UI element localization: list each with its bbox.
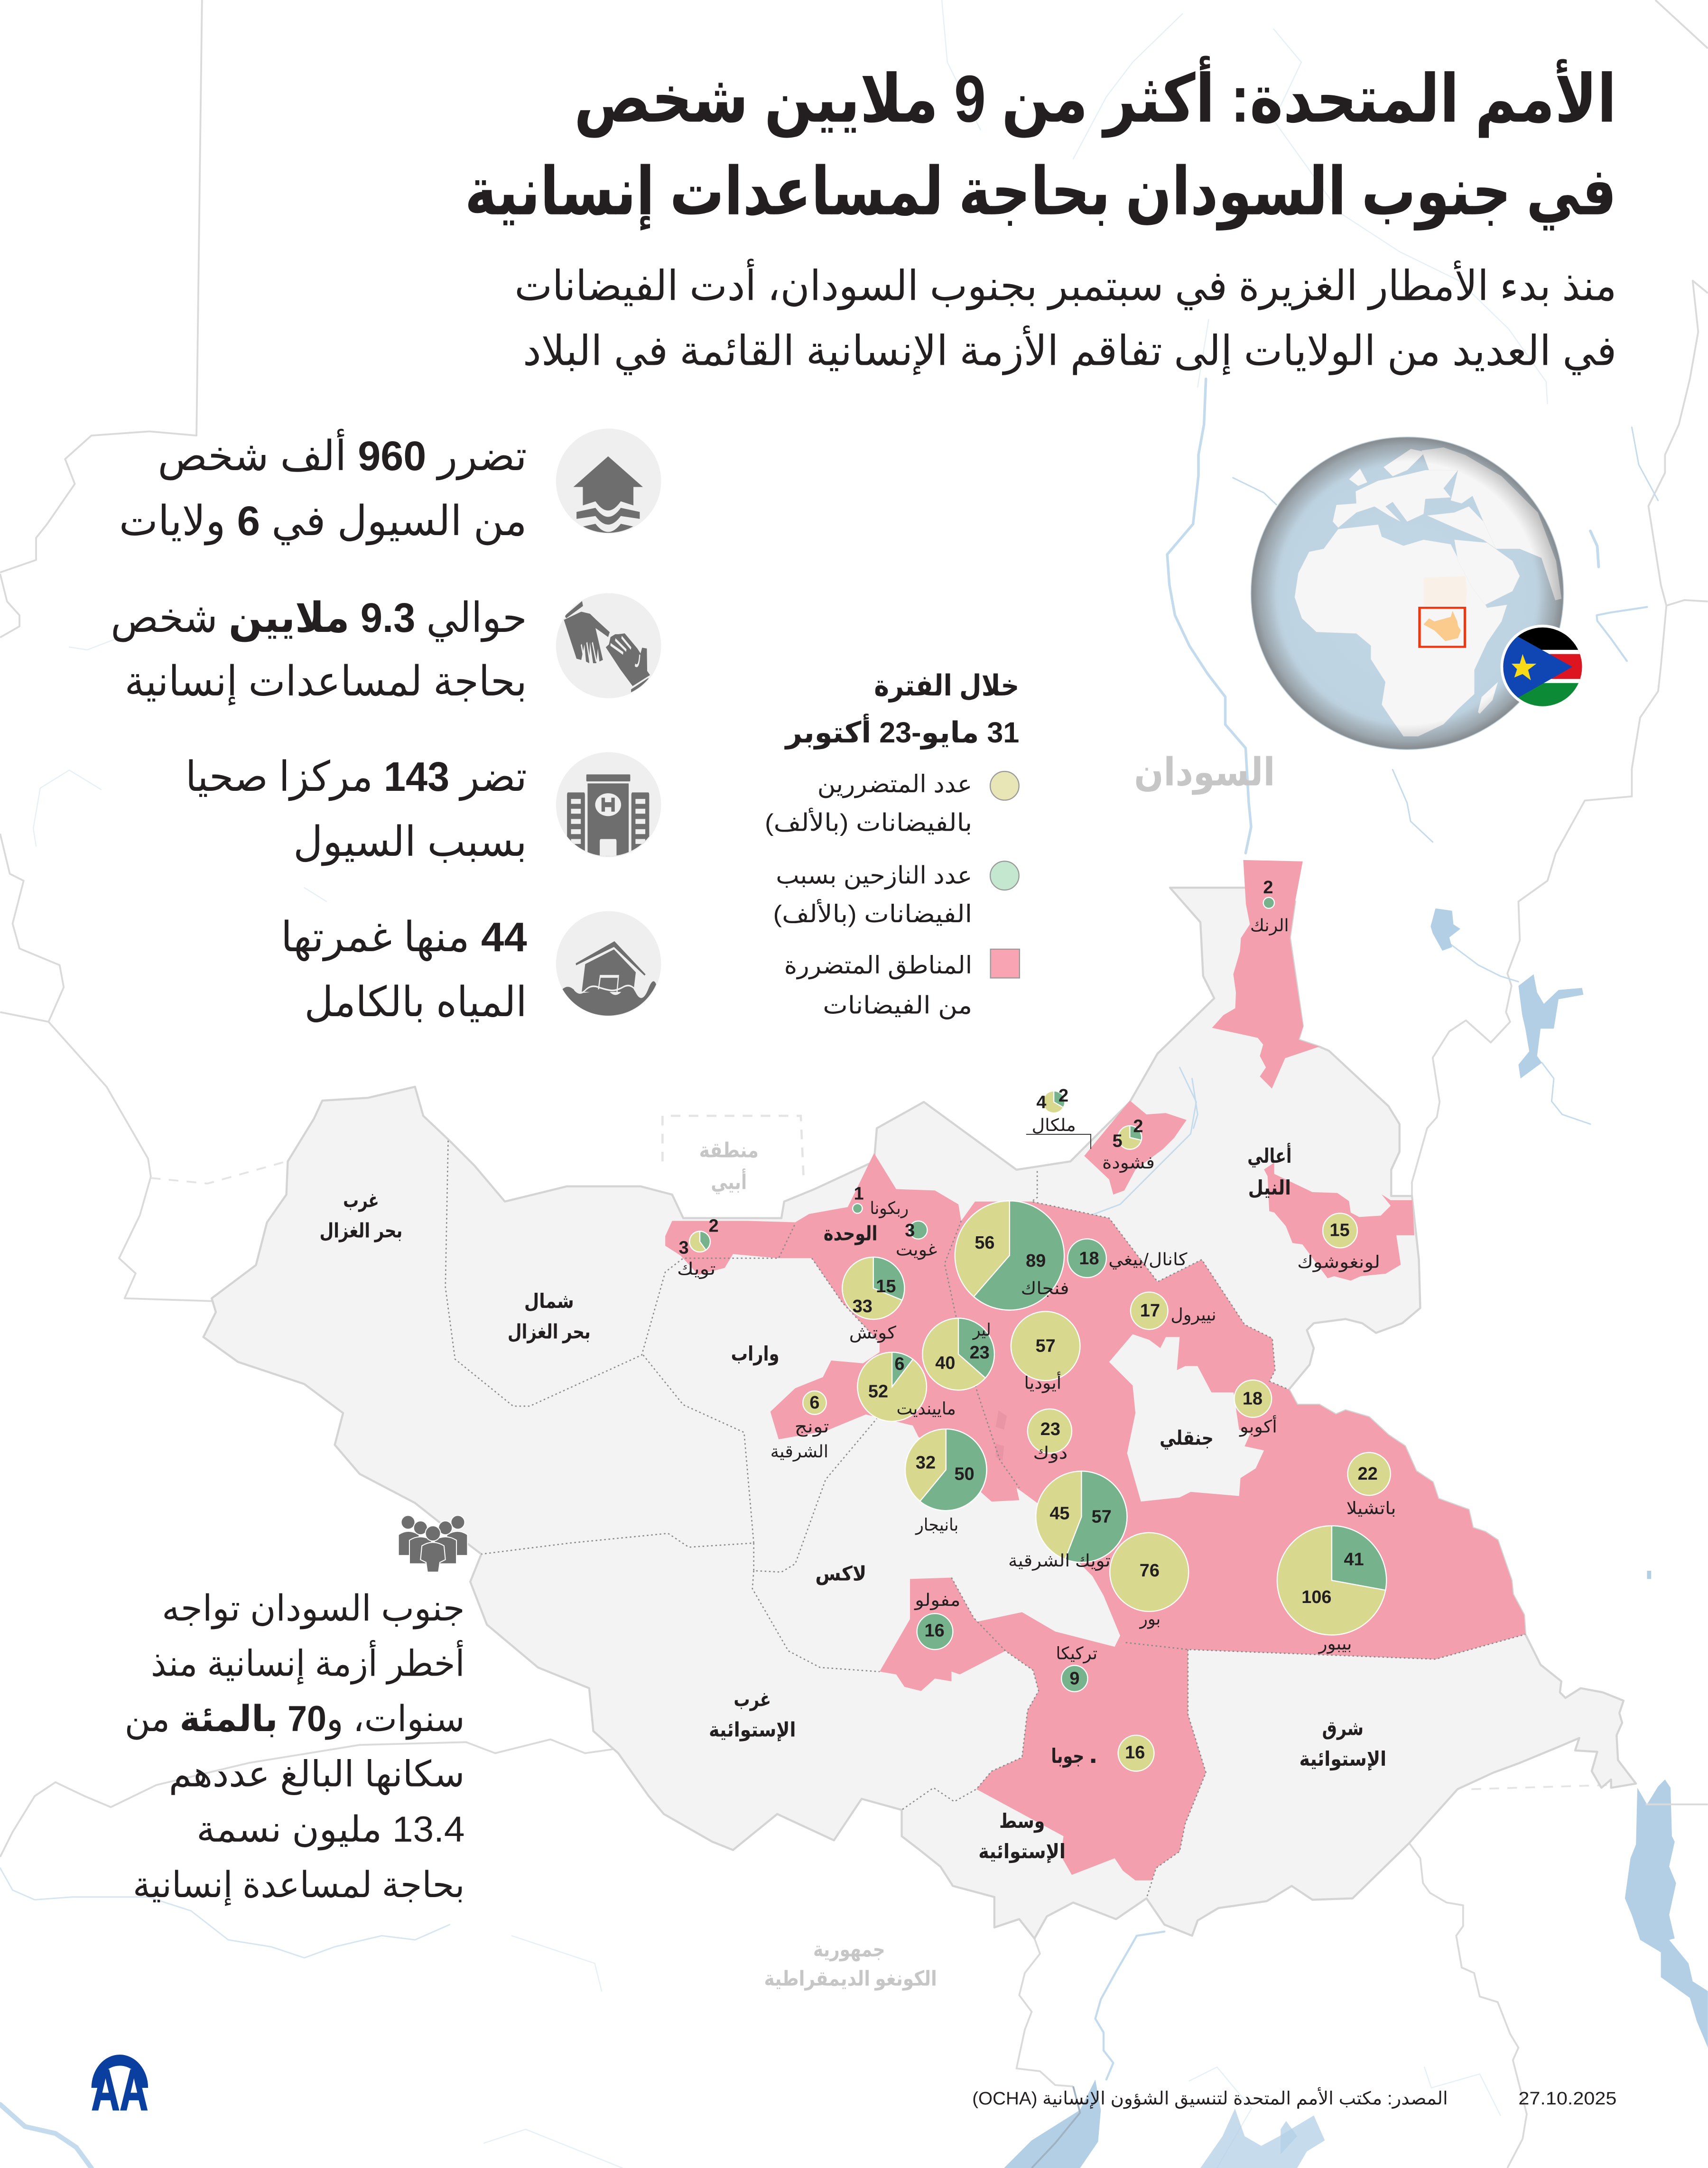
bubble: Bor — [1110, 1533, 1188, 1612]
pie: Panyijar — [905, 1429, 987, 1510]
bubble: Nyirol — [1131, 1292, 1168, 1329]
map: county labels: تونج — [795, 1417, 829, 1436]
bubble: Rubkona: 1 — [854, 1184, 864, 1204]
map: county labels: أكوبو — [1239, 1415, 1277, 1436]
map: county labels: مفولو — [914, 1590, 960, 1610]
map: neighbouring country names: أبيي — [711, 1168, 747, 1195]
map: county labels: أيوديا — [1024, 1372, 1061, 1393]
icon: hospital — [556, 752, 661, 860]
map: county labels: فشودة — [1102, 1153, 1155, 1173]
map: region names: وسط — [999, 1810, 1045, 1833]
map: county labels: الشرقية — [770, 1442, 828, 1462]
map: region names: الإستوائية — [1299, 1748, 1386, 1771]
map: neighbouring country names — [699, 750, 1275, 1991]
pie: Fashoda: 2 — [1133, 1116, 1143, 1136]
map: region names — [320, 1143, 1386, 1863]
map: county labels: تويك الشرقية — [1008, 1551, 1111, 1571]
text block: humanitarian crisis note: بحاجة لمساعدة إنسانية — [133, 1865, 465, 1906]
locator globe — [1251, 437, 1563, 750]
pie: Malakal: 4 — [1036, 1093, 1046, 1112]
pie: Leer: 23 — [970, 1343, 990, 1362]
bubble: Ayod — [1011, 1311, 1080, 1380]
bubble: Canal Pigi — [1068, 1239, 1106, 1278]
bubble: Guit: 3 — [905, 1221, 915, 1241]
icon: South Sudan flag — [1500, 624, 1582, 706]
bubble: Mvolo — [917, 1613, 953, 1649]
map: region names: بحر الغزال — [508, 1320, 591, 1343]
pie: Twic East: 45 — [1049, 1504, 1069, 1524]
legend item: affected areas — [784, 949, 1020, 1019]
bubble: Renk: 2 — [1263, 878, 1273, 898]
legend item: affected: عدد المتضررين — [817, 770, 972, 798]
bubble: Tonj East — [803, 1391, 826, 1415]
bubble: Duk: 23 — [1040, 1419, 1060, 1439]
map: county labels: مايينديت — [896, 1399, 956, 1418]
map: neighbouring country names: جمهورية — [813, 1938, 885, 1962]
pie: Mayendit: 52 — [868, 1381, 888, 1401]
map: county labels: ربكونا — [870, 1198, 909, 1218]
map: county labels — [677, 916, 1396, 1768]
map: region names: غرب — [343, 1189, 379, 1212]
map: county labels: غويت — [896, 1240, 937, 1260]
text block: humanitarian crisis note: جنوب السودان تواجه — [162, 1588, 465, 1630]
bubble: Longochuk: 15 — [1330, 1220, 1350, 1240]
map: region names: لاكس — [815, 1562, 866, 1585]
icon: helping hands — [556, 593, 661, 698]
pie: Panyijar: 50 — [955, 1464, 975, 1484]
pie: Twic: 2 — [709, 1216, 719, 1236]
pie: Koch: 33 — [853, 1297, 873, 1316]
bubble: Bor: 76 — [1140, 1561, 1160, 1581]
bubble: Tonj East: 6 — [809, 1393, 819, 1413]
map: region names: أعالي — [1247, 1143, 1291, 1168]
stat: 44 fully submerged: المياه بالكامل — [304, 979, 527, 1025]
map: region names: الوحدة — [824, 1222, 878, 1245]
logo: Anadolu Agency: AA — [92, 2057, 148, 2122]
map: county labels: بور — [1139, 1609, 1160, 1629]
map: county labels: لير — [972, 1320, 991, 1340]
legend item: affected — [765, 770, 1019, 836]
bubble: Ayod: 57 — [1036, 1336, 1056, 1356]
bubble: Pochalla: 22 — [1358, 1464, 1378, 1484]
map: Abyei dashed area — [662, 1116, 804, 1177]
bubble: Guit — [905, 1221, 927, 1241]
stat: 44 fully submerged — [281, 914, 527, 1025]
pie: Malakal: 2 — [1058, 1086, 1068, 1106]
bubble: Duk — [1028, 1409, 1072, 1453]
pie: Twic East — [1036, 1471, 1127, 1562]
text block: humanitarian crisis note: سكانها البالغ عددهم — [169, 1754, 465, 1796]
legend — [765, 669, 1020, 1019]
logo: Anadolu Agency — [92, 2055, 148, 2122]
map: county labels: باتشيلا — [1346, 1498, 1396, 1518]
stat: 9.3 million in need: حوالي 9.3 ملايين شخص — [111, 594, 527, 642]
legend item: affected areas: من الفيضانات — [823, 991, 972, 1019]
map: county labels: كانال/بيغي — [1108, 1250, 1188, 1269]
bubble: Terekeka — [1061, 1666, 1088, 1692]
icon: people group — [399, 1515, 467, 1572]
subtitle: في العديد من الولايات إلى تفاقم الأزمة الإنسانية القائمة في البلاد — [523, 325, 1616, 375]
map: state borders — [446, 1140, 1525, 1899]
map: region names: جنقلي — [1160, 1427, 1214, 1450]
map: county labels: دوك — [1033, 1443, 1068, 1463]
pie: Mayendit: 6 — [894, 1354, 904, 1374]
bubble: Canal Pigi: 18 — [1079, 1249, 1099, 1269]
icon: flooded house arrow — [556, 429, 661, 538]
title — [465, 56, 1616, 231]
pie: Twic East: 57 — [1092, 1507, 1112, 1527]
pie: Twic — [679, 1216, 719, 1258]
bubble: Pochalla — [1347, 1453, 1391, 1495]
legend: خلال الفترة — [874, 669, 1019, 703]
stat: 960 thousand affected — [119, 429, 527, 546]
legend item: displaced: عدد النازحين بسبب — [776, 862, 972, 889]
map: interior rivers — [1087, 1067, 1197, 1217]
bubble: Akobo — [1234, 1380, 1272, 1418]
bubble: Nyirol: 17 — [1140, 1301, 1160, 1321]
pie: Leer: 40 — [935, 1353, 955, 1373]
stat: 44 fully submerged: 44 منها غمرتها — [281, 914, 527, 962]
map: region names: غرب — [733, 1688, 771, 1712]
bubble: Juba: 16 — [1125, 1742, 1145, 1762]
text block: humanitarian crisis note: 13.4 مليون نسمة — [196, 1809, 465, 1851]
map: county labels: نييرول — [1170, 1305, 1216, 1325]
stat: 960 thousand affected: تضرر 960 ألف شخص — [158, 429, 527, 480]
map: county labels: بانيجار — [915, 1515, 958, 1535]
pie: Fangak — [955, 1201, 1064, 1310]
map: county labels: تويك — [677, 1259, 716, 1279]
map: region names: الإستوائية — [978, 1840, 1066, 1863]
pie: Fashoda: 5 — [1113, 1131, 1123, 1151]
map: neighbouring country names: السودان — [1134, 750, 1275, 795]
pie: Fashoda — [1113, 1116, 1143, 1151]
text block: humanitarian crisis note: سنوات، و70 بالمئة من — [125, 1699, 465, 1740]
pie: Fangak: 56 — [975, 1233, 994, 1253]
stat: 960 thousand affected: من السيول في 6 ولايات — [119, 498, 527, 546]
stat: 143 health centres: بسبب السيول — [293, 818, 527, 866]
pie: Mayendit — [857, 1352, 927, 1421]
subtitle — [514, 259, 1616, 375]
map: region names: شمال — [524, 1290, 574, 1312]
pie: Pibor: 106 — [1301, 1587, 1332, 1607]
map: county labels: كوتش — [849, 1323, 897, 1343]
bubble: Rubkona — [853, 1184, 864, 1214]
stat: 9.3 million in need: بحاجة لمساعدات إنسانية — [125, 658, 527, 706]
legend item: displaced: الفيضانات (بالألف) — [773, 899, 972, 927]
map: county labels: جوبا — [1051, 1745, 1084, 1768]
map: county labels: ملكال — [1032, 1115, 1076, 1135]
map: county labels: تركيكا — [1056, 1643, 1097, 1663]
bubble: Longochuk — [1323, 1214, 1357, 1248]
source line: المصدر: مكتب الأمم المتحدة لتنسيق الشؤون الإنسانية (OCHA) — [972, 2087, 1448, 2109]
bubble: Mvolo: 16 — [925, 1621, 945, 1640]
map: South Sudan land — [204, 888, 1636, 1938]
pie: Panyijar: 32 — [916, 1453, 936, 1473]
text block: humanitarian crisis note: أخطر أزمة إنسانية منذ — [151, 1640, 465, 1685]
pie: Twic: 3 — [679, 1238, 689, 1258]
stat: 143 health centres — [186, 753, 527, 866]
map: region names: الإستوائية — [709, 1719, 796, 1742]
text block: humanitarian crisis note — [125, 1588, 465, 1906]
map: pie charts and bubbles — [679, 878, 1391, 1771]
bubble: Juba — [1118, 1735, 1154, 1771]
stat: 9.3 million in need — [111, 594, 527, 706]
pie: Pibor — [1277, 1526, 1386, 1635]
map: region names: النيل — [1248, 1177, 1291, 1199]
date: 27.10.2025 — [1518, 2089, 1616, 2109]
icon: submerged house — [556, 911, 661, 1020]
map: region names: واراب — [731, 1343, 780, 1366]
bubble: Akobo: 18 — [1243, 1389, 1262, 1408]
bubble: Renk — [1263, 878, 1274, 908]
pie: Pibor: 41 — [1344, 1550, 1364, 1570]
bubble: Terekeka: 9 — [1069, 1668, 1079, 1688]
pie: Fangak: 89 — [1026, 1251, 1046, 1271]
map: region names: بحر الغزال — [320, 1220, 402, 1243]
map: flood-affected pink areas — [665, 860, 1525, 1881]
map: county labels: فنجاك — [1021, 1279, 1069, 1298]
pie: Koch: 15 — [876, 1277, 896, 1297]
pie: Koch — [842, 1257, 904, 1319]
map: county labels: الرنك — [1250, 916, 1289, 936]
map: neighbouring country names: منطقة — [699, 1139, 759, 1162]
legend item: affected areas: المناطق المتضررة — [784, 952, 972, 980]
legend: 31 مايو-23 أكتوبر — [784, 713, 1019, 750]
title: الأمم المتحدة: أكثر من 9 ملايين شخص — [574, 56, 1616, 138]
subtitle: منذ بدء الأمطار الغزيرة في سبتمبر بجنوب السودان، أدت الفيضانات — [514, 259, 1616, 310]
legend item: affected: بالفيضانات (بالألف) — [765, 808, 972, 836]
map: county labels: بيبور — [1318, 1634, 1352, 1654]
legend item: displaced — [773, 861, 1019, 927]
stat: 143 health centres: تضر 143 مركزا صحيا — [186, 753, 527, 801]
map: region names: شرق — [1322, 1717, 1364, 1741]
map: neighbouring country names: الكونغو الديمقراطية — [764, 1967, 937, 1991]
pie: Leer — [922, 1318, 994, 1390]
pie: Malakal — [1036, 1086, 1068, 1113]
map: county labels: لونغوشوك — [1297, 1252, 1380, 1272]
